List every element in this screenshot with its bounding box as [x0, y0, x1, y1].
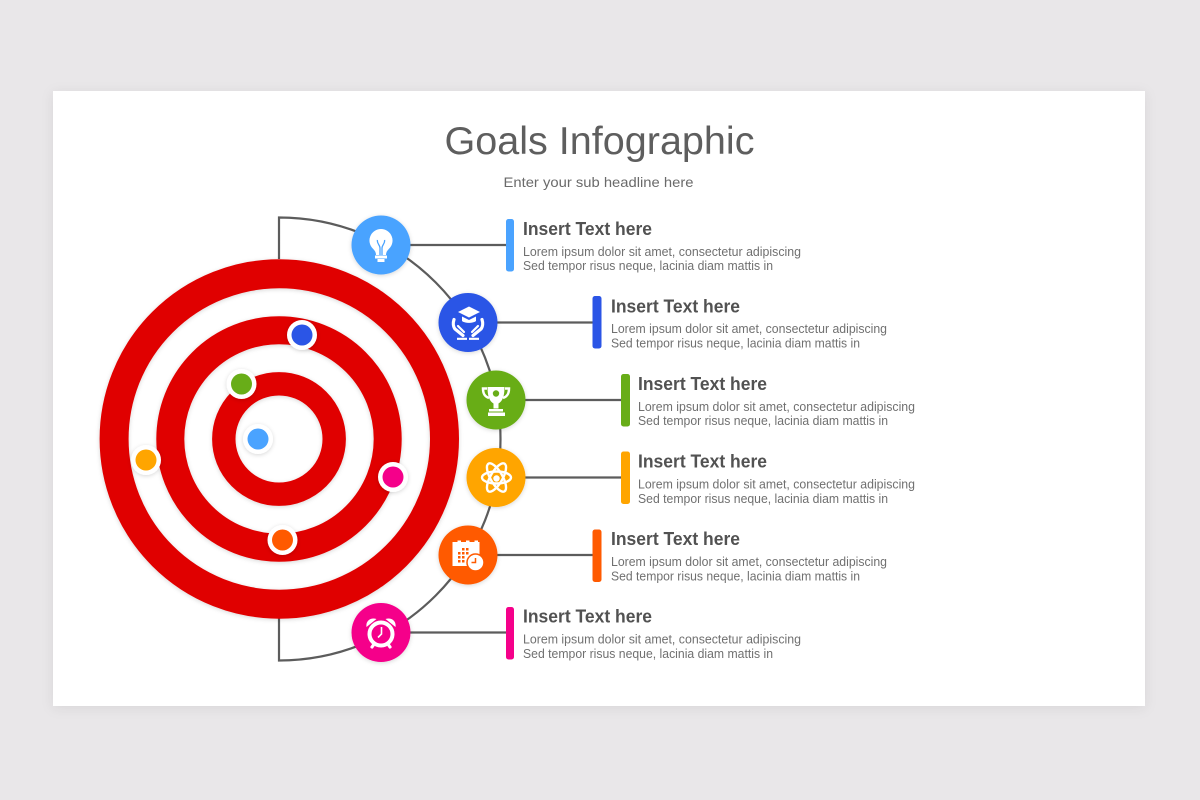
text block 6 [506, 606, 801, 661]
connector arc [279, 218, 500, 660]
text block 2: Sed tempor risus neque, lacinia diam mattis in [611, 336, 860, 350]
text block 1: Lorem ipsum dolor sit amet, consectetur adipiscing [523, 245, 801, 259]
text block 5 [592, 528, 887, 584]
icon: calendar with clock [438, 526, 498, 584]
text block 5: Lorem ipsum dolor sit amet, consectetur adipiscing [611, 555, 887, 569]
text block 3 [621, 373, 915, 428]
icon: graduation cap in hands [438, 293, 498, 352]
text block 6: Insert Text here [523, 606, 652, 626]
text block 5: Sed tempor risus neque, lacinia diam mattis in [611, 570, 860, 584]
text block 1: Insert Text here [523, 218, 652, 239]
text block 2: Lorem ipsum dolor sit amet, consectetur adipiscing [611, 322, 887, 336]
icon: trophy [466, 370, 526, 430]
connector lines [381, 245, 625, 632]
panel: white slide [53, 91, 1145, 706]
text block 2: Insert Text here [611, 296, 740, 316]
marker: orange [268, 525, 298, 555]
marker: amber [131, 445, 161, 475]
outer ring [114, 274, 445, 604]
text block 4 [621, 450, 915, 506]
inner ring [224, 384, 334, 494]
text block 1: Sed tempor risus neque, lacinia diam mattis in [523, 259, 773, 273]
title: Goals Infographic [444, 120, 754, 163]
text block 4: Insert Text here [638, 450, 767, 472]
target chart [114, 274, 445, 604]
text block 5: Insert Text here [611, 528, 740, 549]
text block 6: Lorem ipsum dolor sit amet, consectetur adipiscing [523, 632, 801, 646]
icon: atom [466, 448, 526, 507]
text block 1 [506, 218, 801, 273]
subtitle: Enter your sub headline here [504, 174, 694, 190]
text block 2 [592, 296, 887, 350]
text block 3: Sed tempor risus neque, lacinia diam mattis in [638, 414, 888, 428]
text block 6: Sed tempor risus neque, lacinia diam mattis in [523, 647, 773, 661]
text block 4: Sed tempor risus neque, lacinia diam mattis in [638, 492, 888, 506]
text block 4: Lorem ipsum dolor sit amet, consectetur adipiscing [638, 478, 915, 492]
marker: pink [378, 462, 408, 492]
marker: green [226, 369, 256, 399]
icon: alarm clock [352, 603, 410, 662]
marker: blue [287, 320, 317, 350]
text block 3: Lorem ipsum dolor sit amet, consectetur adipiscing [638, 400, 915, 414]
text block 3: Insert Text here [638, 373, 767, 394]
middle ring [170, 330, 388, 548]
marker: light blue [243, 424, 273, 454]
icon: light bulb [352, 216, 410, 274]
